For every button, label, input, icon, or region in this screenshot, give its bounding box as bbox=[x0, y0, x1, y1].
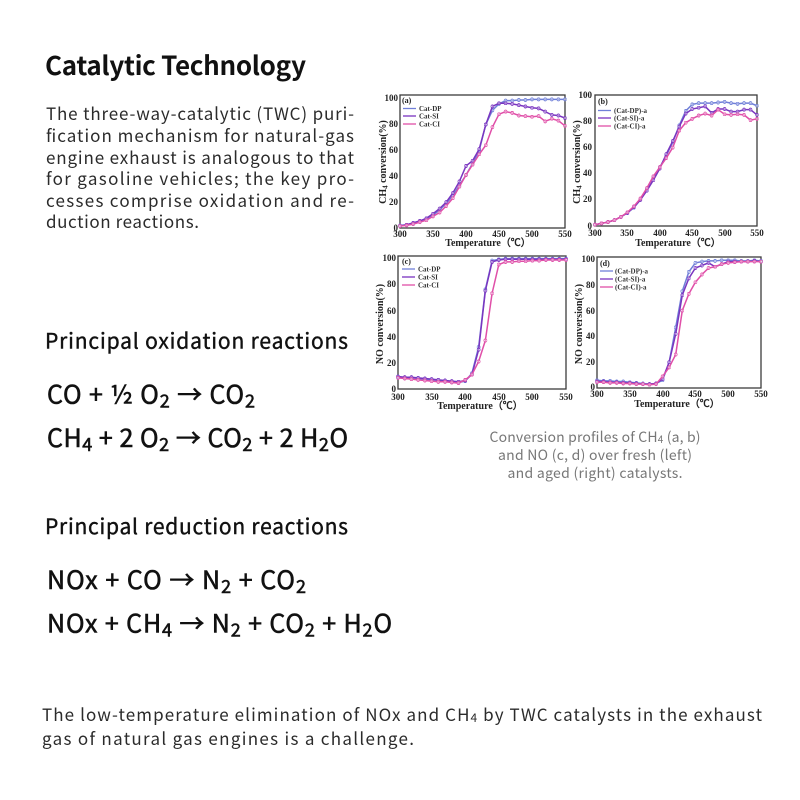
chart d: NO conversion, aged: (Cat-SI)-a bbox=[615, 276, 646, 284]
equation: CH4 oxidation: 2 bbox=[242, 431, 252, 457]
chart a: CH4 conversion, fresh: conversion(%) bbox=[378, 120, 389, 185]
chart d: NO conversion, aged: 20 bbox=[586, 357, 596, 367]
chart a: CH4 conversion, fresh: 500 bbox=[525, 229, 539, 239]
chart a: CH4 conversion, fresh: (a) bbox=[402, 96, 412, 105]
chart a: CH4 conversion, fresh: 400 bbox=[459, 229, 473, 239]
title: Catalytic Technology bbox=[45, 46, 306, 83]
chart b: CH4 conversion, aged: CH bbox=[572, 189, 583, 204]
chart a: CH4 conversion, fresh: 100 bbox=[384, 93, 398, 103]
chart a: CH4 conversion, fresh: 4 bbox=[382, 185, 390, 189]
chart c: NO conversion, fresh: 450 bbox=[492, 392, 506, 402]
chart c: NO conversion, fresh: 300 bbox=[391, 392, 405, 402]
chart b: CH4 conversion, aged: 400 bbox=[653, 228, 667, 238]
equation: CH4 oxidation: CH bbox=[47, 419, 82, 455]
chart b: CH4 conversion, aged: (b) bbox=[598, 97, 608, 106]
heading: reduction reactions: Principal reduction reactions bbox=[45, 511, 348, 541]
chart b: CH4 conversion, aged: conversion(%) bbox=[572, 120, 583, 185]
equation: CO oxidation: 2 bbox=[160, 388, 170, 414]
chart a: CH4 conversion, fresh: Temperature（℃） bbox=[445, 236, 531, 249]
chart b: CH4 conversion, aged: 80 bbox=[583, 116, 592, 126]
equation: NOx + CH4: → N bbox=[173, 604, 230, 640]
equation: CH4 oxidation: 2 bbox=[319, 431, 329, 457]
chart a: CH4 conversion, fresh: Cat-CI bbox=[419, 120, 440, 128]
chart b: CH4 conversion, aged: 60 bbox=[583, 142, 592, 152]
equation: CO oxidation: CO + ½ O bbox=[47, 376, 159, 412]
equation: NOx + CH4: O bbox=[373, 604, 392, 640]
chart d: NO conversion, aged: 80 bbox=[586, 280, 596, 290]
heading: oxidation reactions: Principal oxidation reactions bbox=[45, 326, 348, 356]
chart b: CH4 conversion, aged: 550 bbox=[750, 228, 764, 238]
chart a: CH4 conversion, fresh bbox=[378, 93, 572, 249]
chart b: CH4 conversion, aged: 20 bbox=[583, 194, 592, 204]
equation: NOx + CO: NOx + CO → N bbox=[47, 561, 220, 597]
equation: NOx + CH4: 2 bbox=[305, 616, 315, 642]
figure caption: Conversion profiles of CH bbox=[490, 427, 658, 447]
chart d: NO conversion, aged: 350 bbox=[623, 389, 637, 399]
equation: NOx + CO: 2 bbox=[296, 573, 306, 599]
chart b: CH4 conversion, aged: 350 bbox=[620, 228, 634, 238]
chart d: NO conversion, aged: (d) bbox=[600, 259, 610, 268]
intro text block: duction reactions. bbox=[46, 208, 199, 233]
chart c: NO conversion, fresh: 60 bbox=[387, 306, 396, 316]
figure caption: and aged (right) catalysts. bbox=[508, 463, 682, 483]
chart c: NO conversion, fresh: 0 bbox=[392, 384, 396, 394]
intro text block: for gasoline vehicles; the key pro- bbox=[46, 165, 354, 190]
chart a: CH4 conversion, fresh: CH bbox=[378, 189, 389, 204]
chart c: NO conversion, fresh: 350 bbox=[425, 392, 439, 402]
chart a: CH4 conversion, fresh: 20 bbox=[389, 197, 398, 207]
chart a: CH4 conversion, fresh: 60 bbox=[389, 145, 398, 155]
chart a: CH4 conversion, fresh: 0 bbox=[394, 223, 398, 233]
chart c: NO conversion, fresh: 20 bbox=[387, 358, 396, 368]
equation: NOx + CH4: NOx + CH bbox=[47, 604, 161, 640]
chart b: CH4 conversion, aged: (Cat-CI)-a bbox=[614, 122, 646, 130]
equation: CH4 oxidation: 4 bbox=[82, 431, 92, 457]
chart b: CH4 conversion, aged: 450 bbox=[685, 228, 699, 238]
chart b: CH4 conversion, aged: (Cat-SI)-a bbox=[614, 114, 645, 122]
chart b: CH4 conversion, aged: 300 bbox=[588, 228, 602, 238]
chart b: CH4 conversion, aged bbox=[572, 90, 764, 249]
chart d: NO conversion, aged bbox=[574, 254, 768, 410]
chart d: NO conversion, aged: 300 bbox=[590, 389, 604, 399]
chart c: NO conversion, fresh: 100 bbox=[382, 253, 396, 263]
chart d: NO conversion, aged: NO conversion(%) bbox=[574, 284, 585, 364]
equation: NOx + CH4: + CO bbox=[242, 604, 304, 640]
chart d: NO conversion, aged: (Cat-DP)-a bbox=[615, 268, 649, 276]
chart c: NO conversion, fresh: Temperature（℃） bbox=[437, 399, 523, 412]
intro text block: fication mechanism for natural-gas bbox=[46, 122, 354, 147]
equation: CH4 oxidation: + 2 O bbox=[93, 419, 159, 455]
chart b: CH4 conversion, aged: 40 bbox=[583, 168, 592, 178]
chart d: NO conversion, aged: (Cat-CI)-a bbox=[615, 284, 647, 292]
equation: CO oxidation: 2 bbox=[245, 388, 255, 414]
chart a: CH4 conversion, fresh: Cat-SI bbox=[419, 112, 439, 120]
equation: NOx + CH4: 4 bbox=[162, 616, 172, 642]
closing statement bbox=[42, 701, 763, 750]
equation: NOx + CO: 2 bbox=[221, 573, 231, 599]
chart d: NO conversion, aged: 550 bbox=[754, 389, 768, 399]
chart d: NO conversion, aged: 0 bbox=[590, 382, 596, 392]
equation: CO oxidation: → CO bbox=[171, 376, 244, 412]
chart b: CH4 conversion, aged: Temperature（℃） bbox=[635, 236, 721, 249]
chart a: CH4 conversion, fresh: 40 bbox=[389, 171, 398, 181]
chart c: NO conversion, fresh: 80 bbox=[387, 279, 396, 289]
intro text block bbox=[46, 100, 355, 233]
chart c: NO conversion, fresh: 500 bbox=[525, 392, 539, 402]
chart b: CH4 conversion, aged: 4 bbox=[576, 185, 584, 189]
closing statement: gas of natural gas engines is a challenge. bbox=[42, 725, 414, 750]
closing statement: by TWC catalysts in the exhaust bbox=[478, 701, 763, 726]
chart d: NO conversion, aged: 450 bbox=[688, 389, 702, 399]
chart a: CH4 conversion, fresh: 550 bbox=[558, 229, 572, 239]
figure caption: and NO (c, d) over fresh (left) bbox=[498, 445, 692, 465]
chart c: NO conversion, fresh: Cat-CI bbox=[418, 282, 439, 290]
equation: NOx + CO: + CO bbox=[232, 561, 295, 597]
equation: CH4 oxidation: + 2 H bbox=[253, 419, 318, 455]
chart c: NO conversion, fresh: 550 bbox=[559, 392, 573, 402]
chart c: NO conversion, fresh: Cat-SI bbox=[418, 274, 438, 282]
closing statement: 4 bbox=[471, 709, 478, 726]
chart c: NO conversion, fresh: (c) bbox=[402, 257, 411, 266]
equation: NOx + CH4: 2 bbox=[231, 616, 241, 642]
chart a: CH4 conversion, fresh: 300 bbox=[393, 229, 407, 239]
chart a: CH4 conversion, fresh: 350 bbox=[426, 229, 440, 239]
figure caption: 4 bbox=[658, 431, 664, 446]
chart d: NO conversion, aged: 400 bbox=[656, 389, 670, 399]
chart d: NO conversion, aged: 40 bbox=[586, 331, 596, 341]
chart b: CH4 conversion, aged: (Cat-DP)-a bbox=[614, 107, 648, 115]
figure caption bbox=[490, 427, 700, 483]
chart b: CH4 conversion, aged: 0 bbox=[588, 221, 592, 231]
chart c: NO conversion, fresh: NO conversion(%) bbox=[375, 284, 386, 364]
chart b: CH4 conversion, aged: 100 bbox=[578, 90, 592, 100]
equation: NOx + CH4: 2 bbox=[363, 616, 373, 642]
chart d: NO conversion, aged: Temperature（℃） bbox=[634, 397, 720, 410]
chart d: NO conversion, aged: 60 bbox=[586, 306, 596, 316]
chart d: NO conversion, aged: 100 bbox=[582, 254, 596, 264]
chart c: NO conversion, fresh: 400 bbox=[458, 392, 472, 402]
equation: CH4 oxidation: O bbox=[329, 419, 348, 455]
equation: CH4 oxidation: → CO bbox=[170, 419, 242, 455]
chart c: NO conversion, fresh bbox=[375, 253, 573, 412]
equation: NOx + CH4: + H bbox=[316, 604, 362, 640]
chart a: CH4 conversion, fresh: Cat-DP bbox=[419, 105, 442, 113]
intro text block: The three-way-catalytic (TWC) puri- bbox=[46, 100, 354, 125]
closing statement: The low-temperature elimination of NOx and CH bbox=[42, 701, 469, 726]
chart c: NO conversion, fresh: 40 bbox=[387, 332, 396, 342]
equation: CH4 oxidation: 2 bbox=[159, 431, 169, 457]
chart a: CH4 conversion, fresh: 80 bbox=[389, 119, 398, 129]
chart c: NO conversion, fresh: Cat-DP bbox=[418, 266, 441, 274]
chart d: NO conversion, aged: 500 bbox=[721, 389, 735, 399]
chart a: CH4 conversion, fresh: 450 bbox=[492, 229, 506, 239]
figure caption: (a, b) bbox=[663, 427, 700, 447]
intro text block: cesses comprise oxidation and re- bbox=[46, 187, 354, 212]
chart b: CH4 conversion, aged: 500 bbox=[718, 228, 732, 238]
intro text block: engine exhaust is analogous to that bbox=[46, 144, 355, 169]
